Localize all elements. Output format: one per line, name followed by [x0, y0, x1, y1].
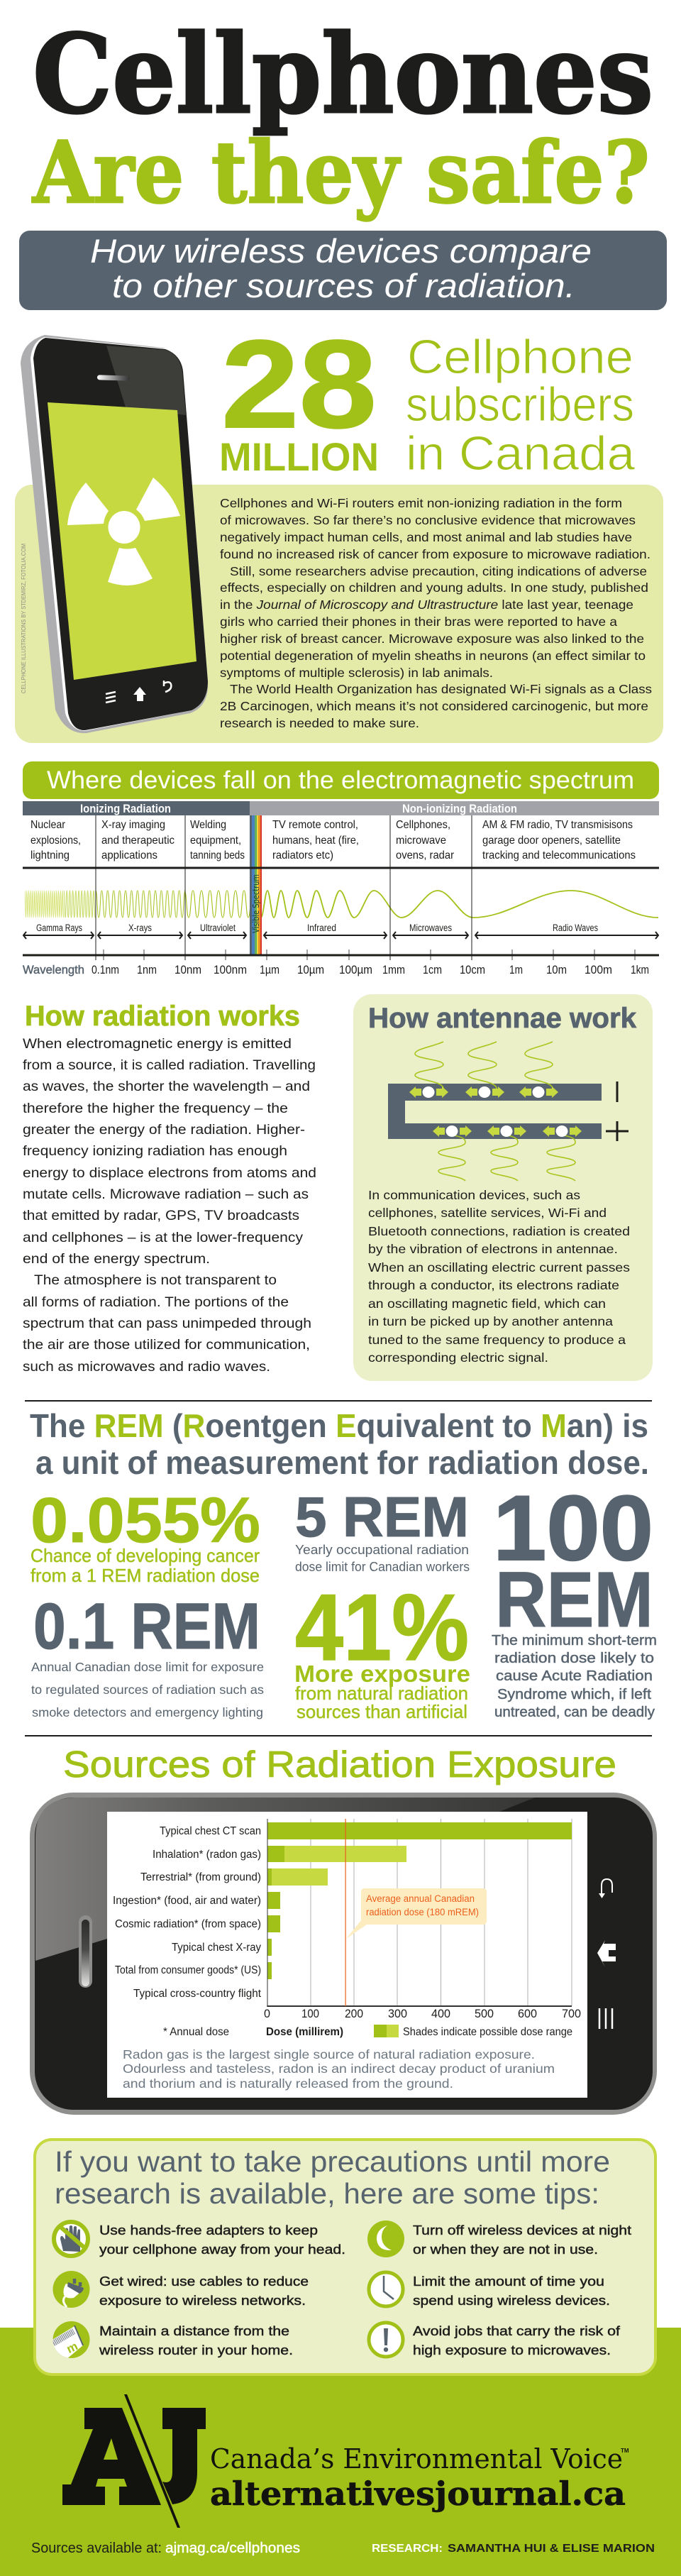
wavelength axis labels: 1cm	[423, 964, 442, 976]
text block: how radiation works: mutate cells. Microwave radiation – such as	[23, 1187, 309, 1202]
wavelength axis labels: 100m	[585, 964, 612, 976]
stat: 0.1 REM: 0.1 REM	[33, 1590, 260, 1663]
text block: intro: symptoms of multiple sclerosis) in lab animals.	[220, 666, 493, 680]
stat label: cellphone subscribers in Canada: Cellphone	[407, 330, 633, 384]
axis labels: 400	[431, 2008, 450, 2020]
logo tagline: alternativesjournal.ca	[210, 2475, 626, 2513]
heading: how radiation works: How radiation works	[25, 1001, 300, 1032]
text block: radon	[123, 2047, 555, 2091]
text block: intro: higher risk of breast cancer. Microwave exposure was also linked to the	[220, 632, 644, 646]
axis labels	[264, 2008, 581, 2020]
text block: how radiation works: frequency ionizing radiation has enough	[23, 1143, 287, 1159]
device lists: microwave	[396, 835, 446, 847]
tip: limit time	[369, 2272, 610, 2308]
text block: intro: 2B Carcinogen, which means it’s not considered carcinogenic, but more	[220, 699, 648, 713]
sources line: Sources available at:	[31, 2541, 162, 2556]
wavelength axis labels: 1m	[509, 964, 523, 976]
credits: RESEARCH:	[372, 2543, 443, 2555]
wavelength axis labels: 0.1nm	[92, 964, 119, 976]
stat: 41%: 41%	[295, 1575, 469, 1680]
device lists: Cellphones,	[396, 819, 450, 831]
row labels: Typical chest X-ray	[172, 1942, 261, 1954]
stat: 0.1 REM: to regulated sources of radiation such as	[31, 1683, 264, 1697]
text block: how radiation works: therefore the higher the frequency – the	[23, 1101, 288, 1116]
stat: 41%: sources than artificial	[297, 1701, 467, 1722]
tip: get wired: exposure to wireless networks.	[99, 2293, 306, 2308]
band labels: Microwaves	[409, 923, 452, 933]
axis labels: 600	[518, 2008, 537, 2020]
device lists: TV remote control,	[272, 819, 358, 831]
legend: Dose (millirem)	[266, 2026, 343, 2038]
text block: antennae: cellphones, satellite services, Wi-Fi and	[368, 1206, 607, 1220]
visible spectrum: Visible Spectrum	[250, 874, 261, 933]
tip: limit time: Limit the amount of time you	[413, 2274, 604, 2289]
stat: 41%: from natural radiation	[295, 1683, 468, 1704]
device lists: equipment,	[190, 835, 241, 847]
text block: how radiation works: from a source, it is called radiation. Travelling	[23, 1057, 316, 1073]
device lists: applications	[101, 849, 157, 862]
text block: how radiation works: the air are those utilized for communication,	[23, 1337, 310, 1353]
stat: 28 million: 28	[221, 315, 377, 454]
row labels: Inhalation* (radon gas)	[153, 1849, 261, 1861]
average dose line and callout: radiation dose (180 mREM)	[366, 1907, 479, 1917]
device lists: explosions,	[31, 835, 81, 847]
text block: antennae: an oscillating magnetic field, which can	[368, 1297, 606, 1311]
heading: tips: If you want to take precautions until more	[55, 2145, 610, 2178]
tip: turn off at night: Turn off wireless devices at night	[413, 2223, 631, 2238]
wave	[25, 890, 658, 918]
text block: how radiation works: and cellphones – is at the lower-frequency	[23, 1230, 303, 1245]
text block: intro: found no increased risk of cancer from exposure to microwave radiation.	[220, 547, 650, 561]
device lists: X-ray imaging	[101, 819, 165, 831]
device lists	[31, 819, 636, 862]
row labels: Typical cross-country flight	[133, 1988, 262, 2000]
screen	[107, 1812, 587, 2098]
row labels: Ingestion* (food, air and water)	[113, 1895, 261, 1907]
banner: how wireless devices compare: How wireless devices compare	[90, 232, 592, 270]
axis labels: 500	[475, 2008, 494, 2020]
text block: intro: The World Health Organization has designated Wi-Fi signals as a Class	[230, 682, 652, 696]
stat: 41%: More exposure	[294, 1661, 470, 1687]
tip: avoid jobs	[369, 2323, 621, 2357]
band labels	[36, 923, 598, 933]
stat: 0.1 REM: smoke detectors and emergency lighting	[32, 1705, 263, 1719]
text block: antennae: corresponding electric signal.	[368, 1350, 548, 1365]
text block: intro: research is needed to make sure.	[220, 716, 419, 730]
wavelength axis labels: 10m	[546, 964, 567, 976]
average dose line and callout	[345, 1819, 487, 2006]
photo credit: CELLPHONE ILLUSTRATIONS BY STDEMIRZ, FOTOLIA.COM	[20, 544, 27, 693]
banner: how wireless devices compare: to other sources of radiation.	[112, 267, 575, 304]
tip: avoid jobs: Avoid jobs that carry the risk of	[413, 2323, 621, 2338]
text block: radon: Odourless and tasteless, radon is an indirect decay product of uranium	[123, 2062, 555, 2076]
text block: how radiation works: energy to displace electrons from atoms and	[23, 1165, 316, 1181]
stat: 100 REM: cause Acute Radiation	[496, 1668, 653, 1684]
band labels: Gamma Rays	[36, 923, 82, 933]
row labels: Terrestrial* (from ground)	[140, 1871, 261, 1883]
text block: antennae: When an oscillating electric current passes	[368, 1260, 630, 1275]
device lists: Welding	[190, 819, 226, 831]
band labels: Radio Waves	[553, 923, 598, 933]
tip: maintain distance	[51, 2321, 293, 2360]
heading: tips	[55, 2145, 610, 2210]
wavelength axis labels: 1mm	[382, 964, 405, 976]
heading: electromagnetic spectrum: Where devices fall on the electromagnetic spectrum	[47, 766, 634, 794]
text block: how radiation works: greater the energy of the radiation. Higher-	[23, 1122, 305, 1138]
axis labels: 300	[388, 2008, 407, 2020]
device lists: tracking and telecommunications	[482, 849, 636, 862]
heading: REM definition: The REM (Roentgen Equivalent to Man) is	[30, 1407, 648, 1444]
text block: antennae: tuned to the same frequency to produce a	[368, 1333, 626, 1347]
text block: intro	[220, 496, 652, 730]
text block: antennae: Bluetooth connections, radiation is created	[368, 1224, 630, 1238]
stat: 28 million: MILLION	[219, 434, 379, 479]
stat: 5 REM: dose limit for Canadian workers	[295, 1559, 470, 1574]
wavelength axis labels: 1km	[631, 964, 649, 976]
row labels: Typical chest CT scan	[160, 1825, 261, 1837]
icon: home pill	[79, 1915, 92, 1988]
diagram: antenna	[388, 1042, 629, 1181]
text block: intro: effects, especially on children and young adults. In one study, published	[220, 580, 648, 595]
band labels: Ultraviolet	[200, 923, 236, 933]
stat: 0.055%: from a 1 REM radiation dose	[31, 1565, 260, 1586]
device lists: AM & FM radio, TV transmisisons	[482, 819, 633, 831]
text block: intro: girls who carried their phones in their bras were reported to have a	[220, 615, 617, 629]
icon: back button	[599, 1879, 612, 1898]
panel: landscape phone	[30, 1793, 657, 2115]
credits	[372, 2543, 655, 2555]
text block: intro: Still, some researchers advise precaution, citing indications of adverse	[230, 564, 647, 578]
device lists: Nuclear	[31, 819, 66, 831]
banner: how wireless devices compare	[19, 231, 667, 310]
wavelength axis labels: 1nm	[137, 964, 157, 976]
stat: 0.1 REM	[31, 1590, 264, 1719]
grid lines	[23, 815, 659, 960]
text block: antennae: In communication devices, such as	[368, 1188, 580, 1202]
text block: intro: negatively impact human cells, and most animal and lab studies have	[220, 530, 632, 544]
stat label: cellphone subscribers in Canada	[406, 330, 635, 480]
bar chart: radiation sources	[113, 1819, 581, 2038]
tip: maintain distance: Maintain a distance from the	[99, 2323, 289, 2338]
band header: ionizing radiation	[23, 801, 250, 815]
illustration: cellphone with radiation symbol	[21, 335, 208, 733]
band arrows	[23, 932, 658, 939]
visible spectrum	[250, 815, 262, 955]
row labels: Total from consumer goods* (US)	[115, 1964, 261, 1976]
tip: limit time: spend using wireless devices.	[413, 2293, 610, 2308]
average dose line and callout: Average annual Canadian	[366, 1893, 475, 1904]
text block: antennae: by the vibration of electrons in antennae.	[368, 1242, 618, 1256]
text block: intro: Cellphones and Wi-Fi routers emit non-ionizing radiation in the form	[220, 496, 622, 510]
tip: maintain distance: m	[65, 2339, 80, 2356]
tip: maintain distance: wireless router in your home.	[99, 2343, 293, 2357]
stat: 0.055%	[31, 1485, 260, 1586]
text block: how radiation works: all forms of radiation. The portions of the	[23, 1294, 289, 1310]
icon: menu button	[599, 2008, 612, 2029]
stat: 0.055%: 0.055%	[31, 1485, 260, 1556]
device lists: and therapeutic	[101, 835, 175, 847]
logo: AJ	[62, 2394, 206, 2528]
stat: 100 REM	[492, 1476, 657, 1720]
tip: hands-free	[54, 2222, 345, 2257]
panel: how antennae work	[353, 994, 653, 1381]
tip: get wired: Get wired: use cables to reduce	[99, 2274, 309, 2289]
tip: avoid jobs: high exposure to microwaves.	[413, 2343, 611, 2357]
footer background	[0, 2328, 681, 2576]
text block: how radiation works	[23, 1036, 316, 1375]
text block: antennae	[368, 1188, 630, 1365]
text block: antennae: through a conductor, its electrons radiate	[368, 1278, 619, 1292]
device lists: humans, heat (fire,	[272, 835, 359, 847]
heading: REM definition	[30, 1407, 649, 1481]
stat: 41%	[294, 1575, 470, 1722]
band header: ionizing radiation: Ionizing Radiation	[80, 803, 171, 815]
device lists: lightning	[31, 849, 70, 862]
legend: * Annual dose	[163, 2026, 229, 2038]
tip: turn off at night	[367, 2220, 631, 2257]
axis labels: 200	[345, 2008, 363, 2020]
text block: how radiation works: When electromagnetic energy is emitted	[23, 1036, 292, 1052]
heading: REM definition: a unit of measurement for radiation dose.	[35, 1444, 649, 1481]
text block: how radiation works: spectrum that can pass unimpeded through	[23, 1316, 311, 1331]
text block: intro: of microwaves. So far there’s no conclusive evidence that microwaves	[220, 513, 636, 527]
band header: non-ionizing radiation	[250, 801, 659, 815]
text block: intro: in the Journal of Microscopy and Ultrastructure late last year, teenage	[220, 598, 633, 612]
device lists: tanning beds	[190, 849, 245, 862]
panel: intro background	[15, 485, 663, 743]
stat: 100 REM: The minimum short-term	[492, 1633, 657, 1648]
text block: radon: and thorium and is naturally released from the ground.	[123, 2076, 453, 2091]
stat: 100 REM: radiation dose likely to	[494, 1651, 654, 1666]
device lists: garage door openers, satellite	[482, 835, 621, 847]
device lists: ovens, radar	[396, 849, 455, 862]
axis labels: 700	[562, 2008, 581, 2020]
text block: intro: potential degeneration of myelin sheaths in neurons (an effect similar to	[220, 649, 646, 663]
band header: non-ionizing radiation: Non-ionizing Radiation	[402, 803, 517, 815]
text block: how radiation works: end of the energy spectrum.	[23, 1251, 210, 1267]
heading: electromagnetic spectrum	[23, 761, 659, 799]
heading: How antennae work	[368, 1003, 637, 1034]
stat: 100 REM: untreated, can be deadly	[494, 1705, 655, 1720]
logo tagline: Canada’s Environmental Voice	[210, 2443, 623, 2475]
text block: antennae: in turn be picked up by another antenna	[368, 1314, 613, 1328]
row labels	[113, 1825, 262, 2000]
wavelength axis labels	[23, 964, 649, 976]
stat label: cellphone subscribers in Canada: subscribers	[406, 378, 634, 431]
heading: sources of radiation exposure: Sources of Radiation Exposure	[63, 1744, 616, 1785]
stat: 0.055%: Chance of developing cancer	[31, 1545, 260, 1566]
wavelength axis labels: 10nm	[175, 964, 201, 976]
wavelength axis labels: Wavelength	[23, 964, 84, 976]
logo tagline	[210, 2443, 629, 2513]
axis labels: 0	[264, 2008, 270, 2020]
wavelength axis labels: 100µm	[339, 964, 372, 976]
stat: 100 REM: 100	[493, 1476, 653, 1580]
axis labels: 100	[301, 2008, 319, 2020]
tip: get wired	[52, 2271, 309, 2308]
band labels: Infrared	[307, 923, 336, 933]
tip: turn off at night: or when they are not in use.	[413, 2242, 598, 2257]
band labels: X-rays	[128, 923, 152, 933]
stat: 0.1 REM: Annual Canadian dose limit for exposure	[31, 1660, 264, 1674]
credits: SAMANTHA HUI & ELISE MARION	[448, 2543, 655, 2555]
text block: how radiation works: as waves, the shorter the wavelength – and	[23, 1079, 310, 1094]
device lists: radiators etc)	[272, 849, 333, 862]
row labels: Cosmic radiation* (from space)	[115, 1918, 261, 1930]
stat: 5 REM: Yearly occupational radiation	[295, 1542, 469, 1557]
stat: 100 REM: REM	[495, 1556, 653, 1644]
text block: how radiation works: that emitted by radar, GPS, TV broadcasts	[23, 1208, 299, 1223]
tip: hands-free: your cellphone away from your head.	[99, 2242, 345, 2257]
stat: 5 REM: 5 REM	[295, 1485, 469, 1548]
legend	[163, 2025, 572, 2038]
icon: home button	[597, 1940, 616, 1967]
heading: tips: research is available, here are some tips:	[55, 2177, 599, 2210]
logo tagline: TM	[621, 2448, 629, 2454]
sources link: ajmag.ca/cellphones	[165, 2541, 300, 2556]
wavelength axis labels: 10µm	[297, 964, 324, 976]
text block: how radiation works: The atmosphere is not transparent to	[34, 1272, 277, 1288]
text block: how radiation works: such as microwaves and radio waves.	[23, 1359, 270, 1375]
text block: radon: Radon gas is the largest single source of natural radiation exposure.	[123, 2047, 535, 2062]
chart: electromagnetic spectrum	[23, 801, 659, 976]
legend: Shades indicate possible dose range	[403, 2026, 572, 2038]
stat label: cellphone subscribers in Canada: in Canada	[406, 426, 635, 480]
wavelength axis labels: 100nm	[214, 964, 247, 976]
wavelength axis labels: 1µm	[260, 964, 279, 976]
panel: precautions tips	[35, 2140, 655, 2374]
stat: 100 REM: Syndrome which, if left	[497, 1687, 651, 1702]
tip: hands-free: Use hands-free adapters to keep	[99, 2223, 318, 2238]
wavelength axis labels: 10cm	[460, 964, 485, 976]
